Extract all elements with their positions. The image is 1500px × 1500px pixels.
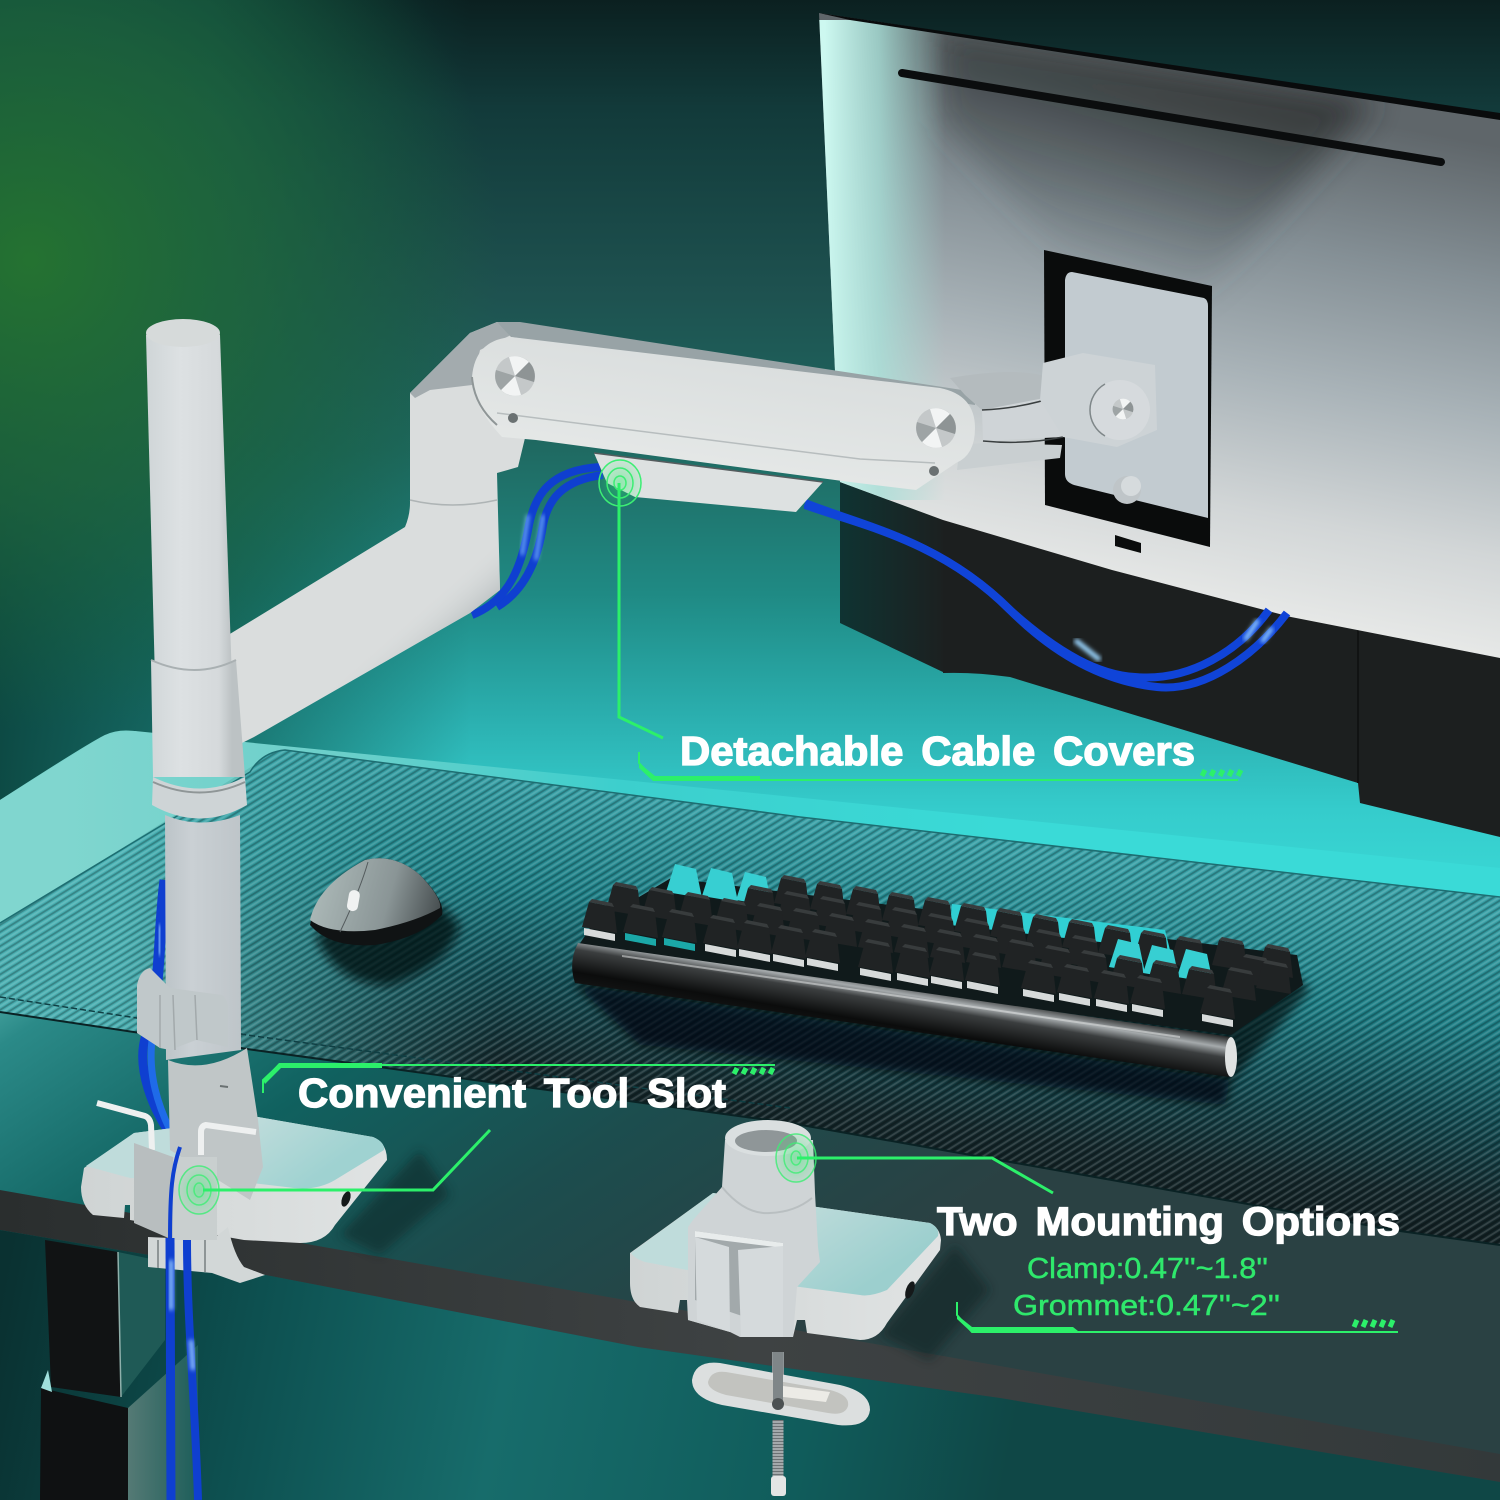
lower post: [165, 815, 241, 1060]
collar: [151, 660, 245, 777]
socket cup: [725, 1120, 811, 1156]
underline: [639, 752, 1241, 781]
cyan key strip: [950, 904, 1170, 950]
lower arm and elbow: [200, 322, 560, 743]
right clamp base: [630, 1120, 990, 1360]
post socket: [168, 1048, 263, 1200]
leader line: [797, 1158, 1053, 1193]
keys: [582, 864, 1293, 1027]
under desk area: [0, 1230, 1500, 1500]
slot fingers: [695, 1237, 730, 1332]
leader line: [203, 1130, 490, 1190]
grommet plate and screw: [692, 1352, 870, 1496]
arm pivot discs: [495, 356, 956, 476]
socket bowl shade: [722, 1187, 812, 1213]
heading: Detachable Cable Covers: [680, 728, 1195, 774]
top surface: [631, 1193, 938, 1295]
collar ring: [152, 777, 247, 818]
hex key left: [97, 1103, 152, 1150]
mouse shadow: [315, 905, 460, 985]
monitor stand shadow block: [840, 470, 1500, 837]
cable cover: [594, 453, 823, 512]
keyboard: [570, 864, 1310, 1105]
hex key right: [201, 1125, 256, 1155]
VESA recess: [1044, 250, 1212, 547]
desk front edge: [0, 1190, 1500, 1482]
mouse: [310, 858, 460, 985]
cables through holder: [170, 1147, 180, 1240]
mounting post: [137, 319, 247, 1147]
leader line: [619, 483, 663, 738]
desk leg: [40, 1240, 198, 1500]
VESA plate: [1065, 272, 1208, 518]
usb port: [903, 1280, 917, 1300]
clamp top surface: [86, 1117, 384, 1188]
lower wrist tongue: [957, 443, 1062, 470]
desk back strip: [0, 731, 1500, 925]
clamp range: Clamp:0.47''~1.8'': [1027, 1253, 1268, 1285]
cables along post: [156, 880, 165, 990]
keyboard wrist tube: [572, 943, 1231, 1077]
usb port: [340, 1190, 352, 1208]
keyboard tray: [577, 878, 1303, 1035]
callout: two mounting options: [775, 1133, 1400, 1332]
left clamp with tool slot: [81, 1048, 450, 1500]
monitor arm: [200, 322, 1157, 743]
monitor slot: [1115, 535, 1141, 553]
callout: convenient tool slot: [178, 1063, 775, 1215]
underline: [957, 1302, 1398, 1332]
upper arm top bevel: [497, 322, 975, 405]
slot opening: [695, 1231, 783, 1330]
cable clip: [137, 968, 228, 1050]
callout: detachable cable covers: [598, 459, 1241, 781]
heading: Convenient Tool Slot: [298, 1070, 726, 1116]
desk mat: [0, 750, 1500, 1245]
monitor top slit: [902, 73, 1441, 162]
upper wrist tongue: [950, 372, 1057, 410]
upper arm: [472, 337, 975, 490]
target ring: [598, 459, 642, 507]
lower bracket: [148, 1227, 265, 1283]
heading: Two Mounting Options: [937, 1200, 1400, 1244]
monitor back: [819, 13, 1500, 658]
clamp base: [81, 1117, 387, 1243]
tool slot holder: [134, 1143, 173, 1240]
underline: [263, 1063, 775, 1093]
keyboard shadow: [570, 960, 1310, 1082]
target ring: [178, 1165, 220, 1215]
target ring: [775, 1133, 817, 1183]
plate knob: [1113, 476, 1141, 504]
clamp shadow: [340, 1150, 450, 1255]
wrist link: [982, 395, 1063, 441]
cable on right: [805, 503, 1287, 687]
grommet range: Grommet:0.47''~2'': [1013, 1290, 1280, 1322]
socket neck: [688, 1140, 820, 1337]
clamp shadow: [880, 1245, 990, 1360]
cables behind arm: [472, 467, 603, 615]
tilt head: [1040, 353, 1157, 447]
desk surface: [0, 731, 1500, 1500]
elbow bevel: [410, 322, 511, 398]
cables below clip: [143, 1035, 180, 1147]
lower arm shading: [200, 473, 500, 743]
